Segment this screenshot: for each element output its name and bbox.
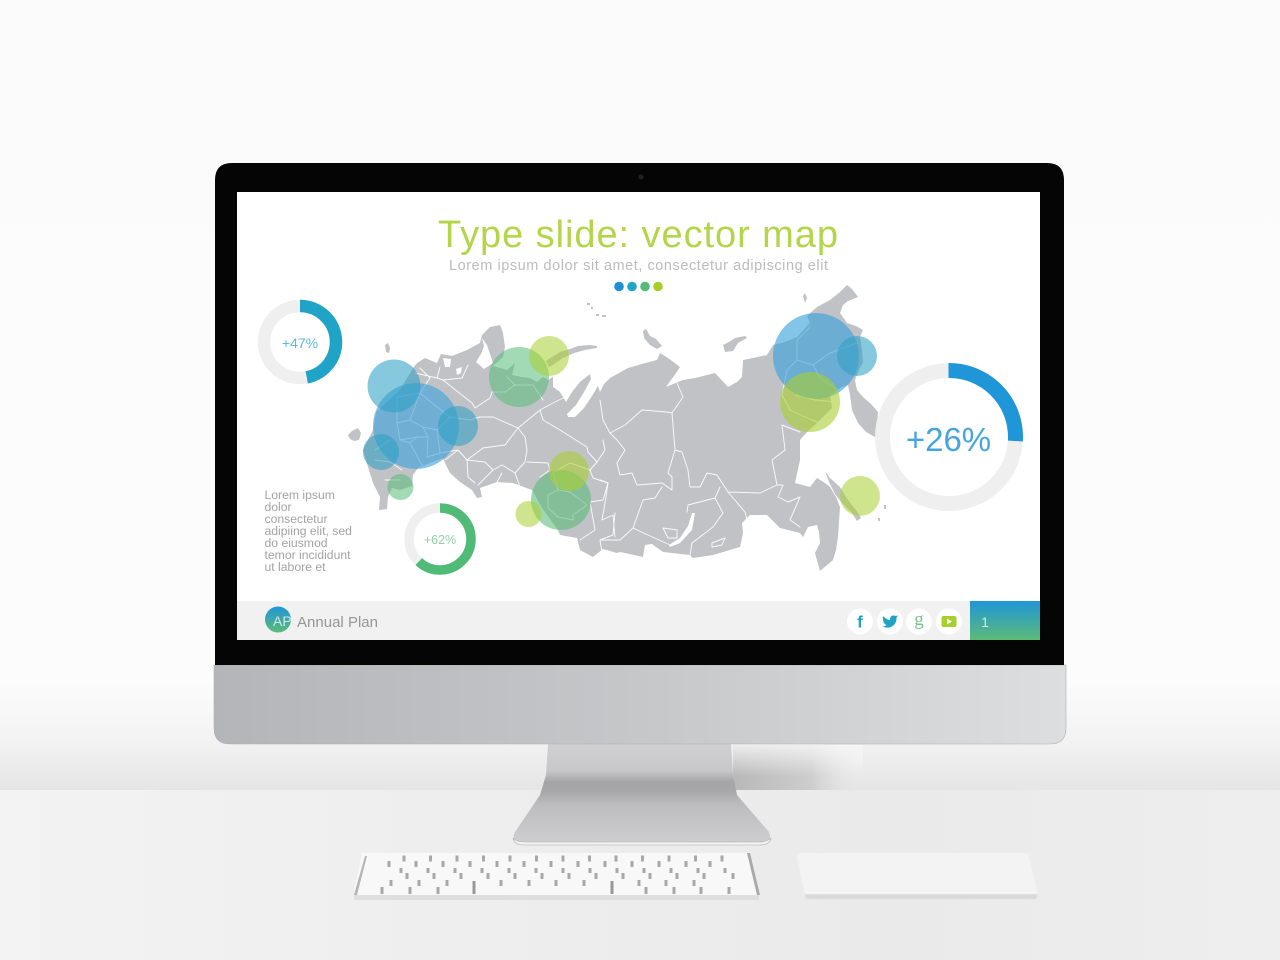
bubble: small yellow south <box>516 501 542 527</box>
body paragraph: ut labore et <box>264 560 326 574</box>
body paragraph: Lorem ipsum <box>264 488 335 502</box>
bubble: yellow sakhalin <box>840 476 880 516</box>
brand name: Annual Plan <box>297 614 378 631</box>
page number block <box>970 601 1040 640</box>
vector map of Russia <box>348 285 886 571</box>
desk surface <box>0 790 1280 960</box>
bubble: teal northwest <box>368 360 420 412</box>
donut: +62%: +62% <box>424 533 456 547</box>
slide screen <box>237 192 1040 640</box>
icon: facebook: f <box>857 612 863 632</box>
bubble: small green caucasus <box>388 474 414 500</box>
bubble: yellow siberia <box>549 451 589 491</box>
bubble: teal south <box>363 434 399 470</box>
icon: youtube <box>936 608 962 634</box>
bubble: yellow far east <box>780 372 840 432</box>
body paragraph: dolor <box>264 500 292 514</box>
bubble: green north urals <box>489 347 549 407</box>
body paragraph: temor incididunt <box>264 548 351 562</box>
four pagination dots <box>614 282 663 291</box>
monitor stand <box>513 744 863 845</box>
body paragraph: do eiusmod <box>264 536 328 550</box>
brand badge <box>265 606 292 632</box>
icon: facebook <box>847 608 873 634</box>
donut: +26%: +26% <box>906 421 991 458</box>
bubble: green siberia <box>531 470 591 530</box>
icon: google: g <box>914 609 924 630</box>
subtitle: Lorem ipsum dolor sit amet, consectetur adipiscing elit <box>449 258 828 274</box>
trackpad <box>797 853 1037 899</box>
donut: +47%: +47% <box>282 335 318 351</box>
donut: +26% <box>882 370 1016 504</box>
donut: +62% <box>409 508 471 570</box>
icon: twitter <box>877 608 903 634</box>
keyboard <box>354 853 760 900</box>
brand badge: AP <box>273 613 292 629</box>
bubble: teal volga <box>438 406 478 446</box>
page number block: 1 <box>981 614 989 630</box>
icon: google <box>906 608 932 634</box>
body paragraph: adipiing elit, sed <box>264 524 352 538</box>
body paragraph: consectetur <box>264 512 328 526</box>
lakes and the white sea <box>443 338 695 547</box>
title: Type slide: vector map <box>438 214 838 256</box>
bubble: teal far east <box>837 336 877 376</box>
bubble: yellow novaya zemlya <box>529 336 569 376</box>
bubble: large blue far east <box>773 313 859 399</box>
monitor body <box>214 163 1066 744</box>
donut: +47% <box>264 306 336 378</box>
bubble: large blue west <box>373 383 459 469</box>
footer bar <box>237 601 1040 640</box>
